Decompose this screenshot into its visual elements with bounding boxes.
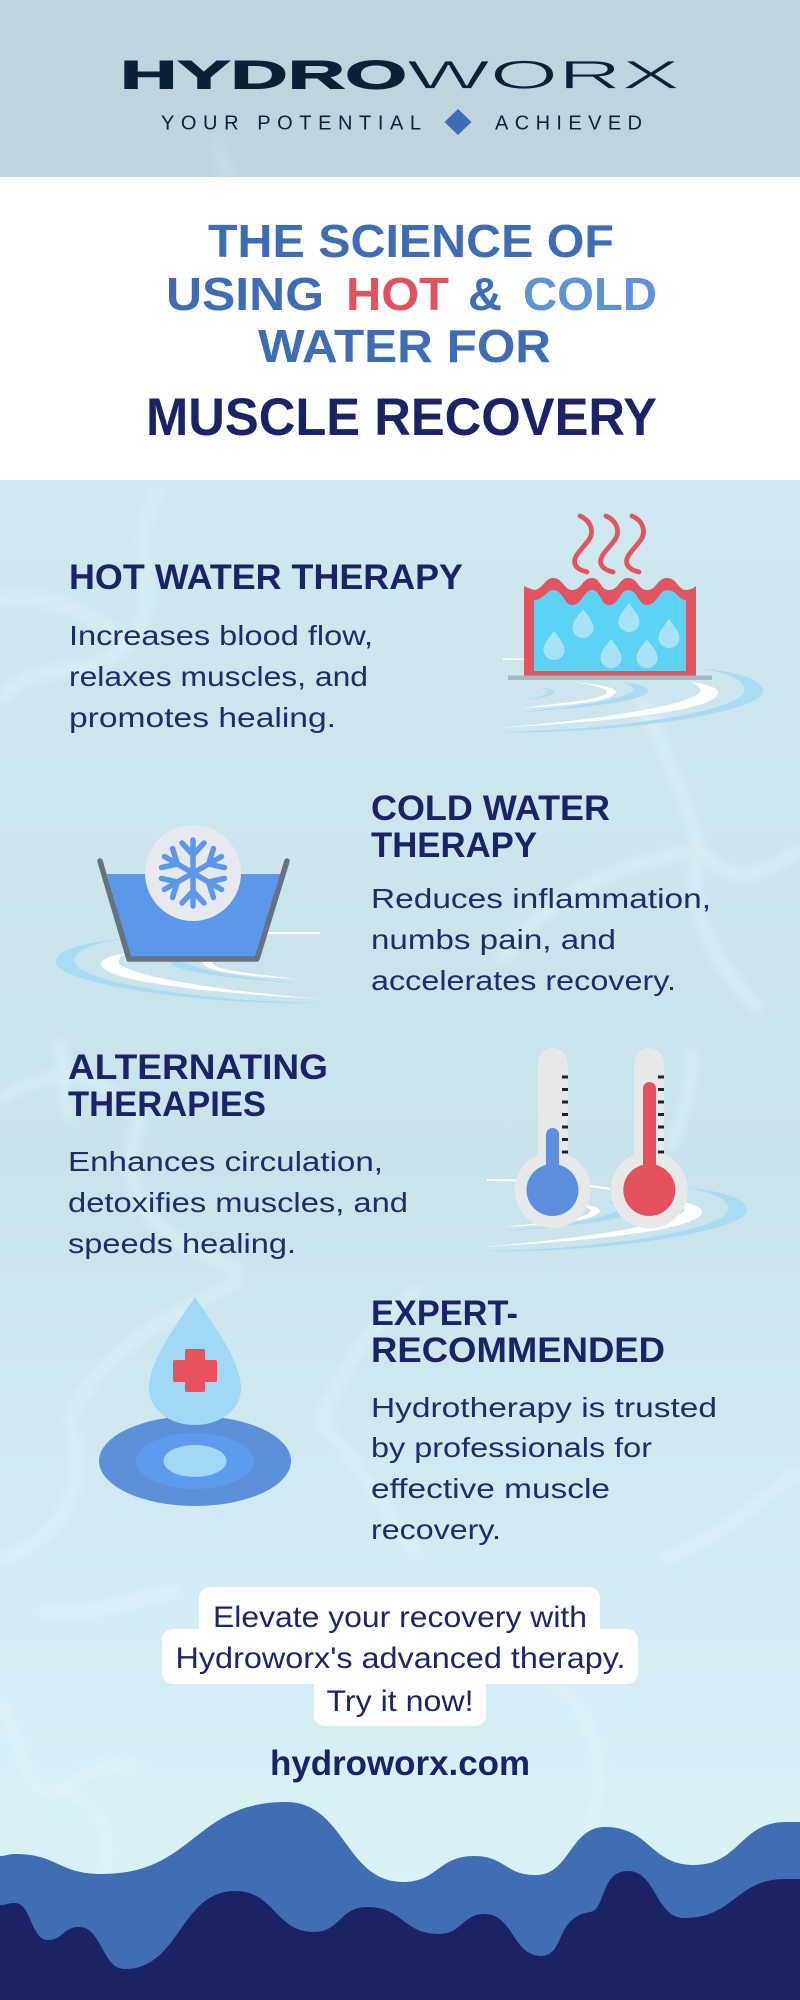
panel: hot water therapy <box>69 558 463 733</box>
title panel: COLD <box>523 268 657 320</box>
icon: hot tub <box>497 516 763 732</box>
title panel: MUSCLE RECOVERY <box>146 388 657 447</box>
callout: call to action <box>162 1587 638 1726</box>
logo: HYDRO <box>120 54 407 98</box>
panel: cold water therapy: THERAPY <box>371 826 537 865</box>
water background <box>0 480 800 2000</box>
panel: expert-recommended: EXPERT- <box>371 1294 518 1333</box>
panel: cold water therapy: accelerates recovery. <box>371 965 676 996</box>
panel: expert-recommended: Hydrotherapy is trusted <box>371 1392 717 1423</box>
icon: medical water drop <box>99 1297 291 1506</box>
header band <box>0 0 800 177</box>
panel: alternating therapies: THERAPIES <box>68 1085 266 1124</box>
icon: thermometers <box>481 1048 747 1251</box>
panel: alternating therapies <box>68 1048 408 1259</box>
panel: cold water therapy: Reduces inflammation, <box>371 883 711 914</box>
title panel: & <box>468 268 502 320</box>
callout: call to action: Hydroworx's advanced therapy. <box>176 1642 626 1675</box>
title panel: WATER FOR <box>258 320 551 372</box>
tagline <box>161 109 642 135</box>
title panel <box>0 177 800 480</box>
logo: WORX <box>407 54 680 98</box>
callout: call to action: Elevate your recovery with <box>213 1601 587 1634</box>
title panel: HOT <box>346 268 449 320</box>
title panel: THE SCIENCE OF <box>208 215 614 267</box>
panel: expert-recommended: RECOMMENDED <box>371 1331 665 1370</box>
panel: alternating therapies: ALTERNATING <box>68 1048 328 1087</box>
tagline: YOUR POTENTIAL <box>161 112 421 134</box>
panel: hot water therapy: promotes healing. <box>69 702 336 733</box>
title panel: USING <box>166 268 324 320</box>
panel: expert-recommended: effective muscle <box>371 1473 610 1504</box>
icon: cold bucket <box>56 825 322 1003</box>
panel: cold water therapy: COLD WATER <box>371 789 610 828</box>
tagline: ACHIEVED <box>495 112 642 134</box>
panel: expert-recommended: by professionals for <box>371 1432 652 1463</box>
website link: hydroworx.com <box>270 1744 530 1783</box>
panel: hot water therapy: Increases blood flow, <box>69 620 373 651</box>
panel: alternating therapies: Enhances circulation, <box>68 1146 383 1177</box>
panel: alternating therapies: detoxifies muscles, and <box>68 1187 408 1218</box>
panel: hot water therapy: relaxes muscles, and <box>69 661 368 692</box>
panel: expert-recommended: recovery. <box>371 1514 501 1545</box>
callout: call to action: Try it now! <box>326 1685 474 1718</box>
panel: hot water therapy: HOT WATER THERAPY <box>69 558 463 597</box>
panel: cold water therapy: numbs pain, and <box>371 924 616 955</box>
panel: expert-recommended <box>371 1294 717 1545</box>
panel: cold water therapy <box>371 789 711 996</box>
panel: alternating therapies: speeds healing. <box>68 1228 296 1259</box>
footer waves <box>0 1802 800 2000</box>
logo <box>120 54 680 98</box>
